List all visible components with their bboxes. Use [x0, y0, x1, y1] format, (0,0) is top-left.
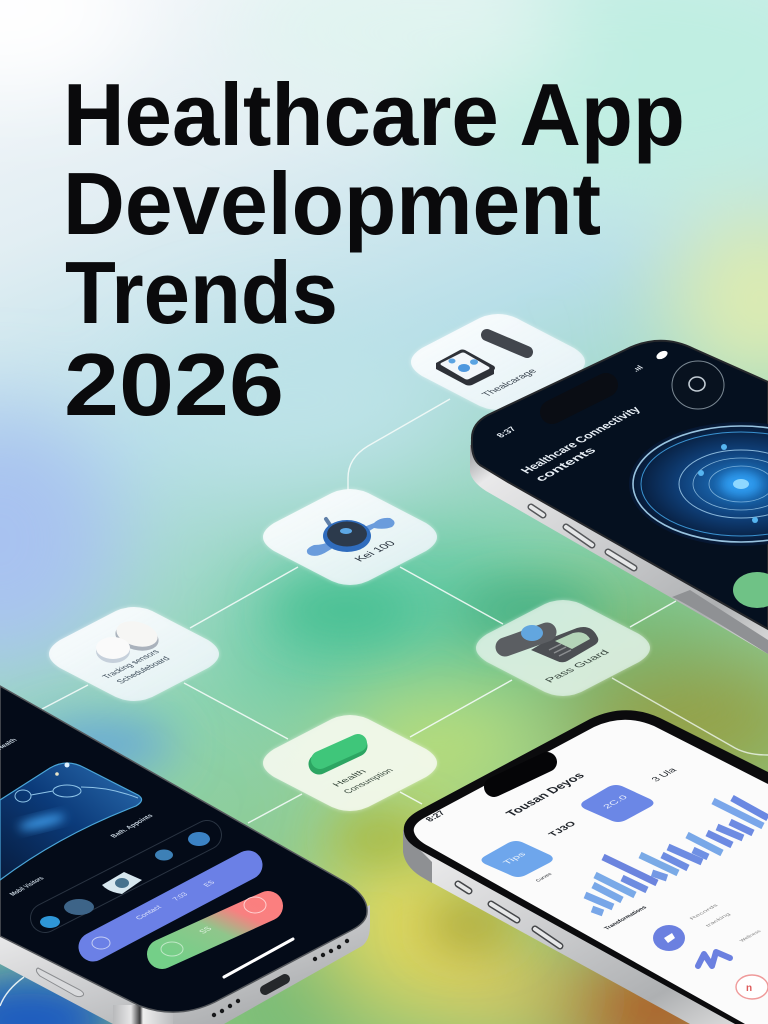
label: Thealcarage — [480, 367, 540, 398]
phone labels: Transformations — [604, 905, 649, 931]
lower panel icons: n — [746, 983, 752, 994]
stat cards — [482, 785, 654, 877]
purple navigation pill: Contact — [135, 905, 163, 921]
label: Scheduleboard — [114, 655, 172, 685]
phone: bottom right, white chart screen — [403, 710, 768, 1024]
phone body metal — [403, 830, 745, 1024]
label: Health — [330, 768, 369, 788]
side buttons — [531, 507, 634, 568]
tile: tablet device — [411, 314, 585, 410]
phone screen — [0, 686, 367, 1012]
phone body metal — [470, 440, 768, 654]
home indicator — [224, 939, 293, 977]
title: 2026 — [64, 335, 284, 434]
connector lines — [0, 399, 768, 1006]
phone labels — [423, 766, 763, 943]
green action button — [733, 572, 768, 608]
phone text: .ııl — [630, 364, 645, 373]
phone labels: Tousan Deyos — [502, 770, 588, 818]
label: Tracking sensors — [100, 648, 162, 680]
title: Trends — [65, 243, 338, 342]
USB port and speakers — [212, 939, 349, 1017]
circular button — [672, 361, 724, 409]
icon: padlock — [505, 625, 598, 662]
side buttons — [458, 884, 560, 946]
phone labels: tracking — [705, 912, 733, 928]
green to coral action pill — [161, 897, 268, 956]
purple navigation pill — [92, 865, 248, 949]
phone labels: 2C.0 — [601, 793, 630, 810]
phone text: 8:37 — [494, 425, 518, 439]
green to coral action pill: SS — [197, 925, 214, 935]
bar chart — [585, 798, 768, 913]
glass health card — [0, 762, 142, 880]
phone labels: TJ3O — [546, 820, 578, 838]
phone text: Healthcare Connectivity — [517, 404, 644, 475]
purple navigation pill: 7:03 — [172, 892, 190, 902]
label: Kei 100 — [352, 539, 399, 563]
status dot — [655, 349, 669, 361]
icon: green capsule — [319, 743, 358, 764]
dynamic island — [494, 762, 547, 787]
tile: smart watch — [263, 489, 437, 585]
side button — [36, 968, 84, 997]
phone labels: Tips — [501, 851, 528, 866]
phone labels: 3 Ula — [649, 766, 679, 783]
title: Healthcare App — [63, 65, 685, 164]
icon: white pills — [96, 617, 161, 663]
phone text: contents — [531, 445, 600, 483]
phone labels: 8:27 — [423, 809, 447, 823]
phone: bottom left, dark app screen — [0, 686, 370, 1024]
phone: top right, dark radar screen — [470, 341, 768, 654]
purple navigation pill: ES — [203, 880, 217, 888]
title: Development — [63, 154, 601, 253]
phone labels: Records — [689, 903, 721, 921]
phone labels: Mobil Visitors — [9, 876, 46, 897]
phone labels: Bath. Appoints — [110, 813, 155, 839]
phone screen — [414, 720, 768, 1024]
phone text — [494, 364, 645, 483]
icon: tablet — [436, 350, 495, 386]
phone screen — [472, 341, 768, 629]
phone body metal — [0, 905, 370, 1024]
phone labels: Curves — [535, 872, 554, 883]
capsule icon row — [40, 832, 210, 928]
tile: padlock device — [476, 600, 650, 696]
tile: wearable patches — [49, 607, 219, 701]
tile: green pill — [263, 715, 437, 811]
phone labels — [0, 738, 155, 897]
bottom metal highlight — [113, 1005, 173, 1024]
phone bezel — [404, 710, 768, 1024]
title — [63, 65, 685, 434]
phone labels: Wellness — [739, 929, 763, 943]
label: Consumption — [341, 767, 396, 795]
radar graphic — [629, 422, 768, 546]
lower panel icons — [653, 925, 768, 999]
dynamic island — [552, 385, 606, 412]
label: Pass Guard — [543, 649, 613, 684]
icon: gauge device — [307, 518, 395, 556]
icon: sensor bar — [487, 335, 527, 352]
